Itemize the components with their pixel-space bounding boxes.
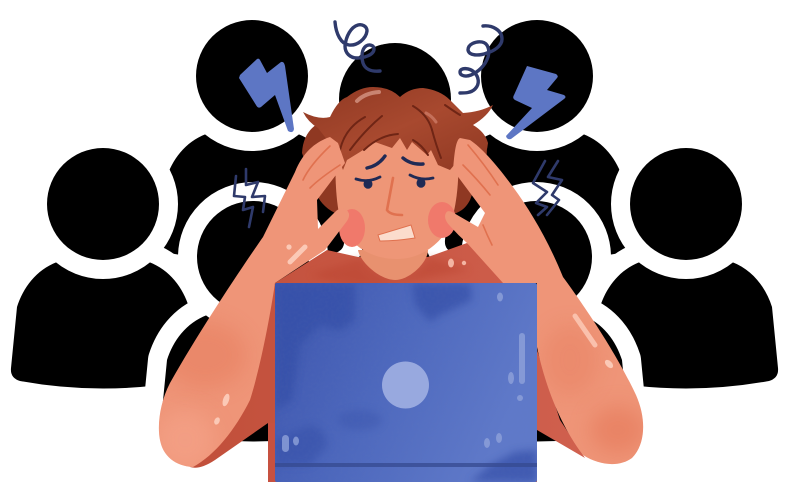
arm highlights left — [290, 247, 305, 262]
cheek right — [428, 202, 456, 238]
cheek left — [339, 209, 365, 247]
crowd: middle right figure — [444, 201, 628, 442]
mouth — [378, 225, 415, 241]
laptop logo — [382, 362, 429, 408]
finger lines left — [303, 146, 340, 188]
laptop shading — [275, 283, 537, 482]
right eye — [410, 175, 433, 188]
crowd: front right figure — [594, 148, 778, 388]
back hair — [302, 120, 487, 215]
icon: big lightning bolt left — [239, 59, 294, 132]
left eyebrow — [367, 156, 385, 168]
laptop bottom line — [275, 463, 537, 467]
hair highlights — [357, 92, 379, 101]
shirt — [190, 243, 585, 482]
laptop — [268, 283, 537, 482]
crowd: back right figure — [445, 20, 629, 260]
laptop grain texture — [275, 283, 537, 482]
face — [335, 125, 459, 259]
hair strands — [340, 105, 460, 158]
crowd: front left figure — [11, 148, 195, 388]
left eye — [356, 177, 380, 189]
person: stressed man — [155, 87, 646, 482]
crowd: back center figure — [303, 43, 487, 284]
crowd: back left figure — [160, 20, 344, 260]
left arm and hand — [155, 137, 349, 470]
nose — [387, 178, 402, 215]
crowd: middle left figure — [161, 201, 345, 442]
laptop reflections — [282, 292, 525, 452]
arm highlights right — [575, 316, 595, 345]
icon: right curl squiggle — [460, 26, 502, 93]
icon: big lightning bolt right — [506, 66, 566, 139]
hair — [303, 87, 493, 170]
right eyebrow — [403, 158, 423, 164]
finger lines right — [463, 145, 498, 245]
shirt highlights — [448, 258, 466, 268]
icon: left curl squiggle — [335, 22, 380, 71]
neck — [358, 250, 428, 280]
icon: small zigzag bolts left — [234, 169, 265, 227]
icon: small zigzag bolts right — [533, 161, 562, 215]
right arm and hand — [445, 138, 646, 464]
